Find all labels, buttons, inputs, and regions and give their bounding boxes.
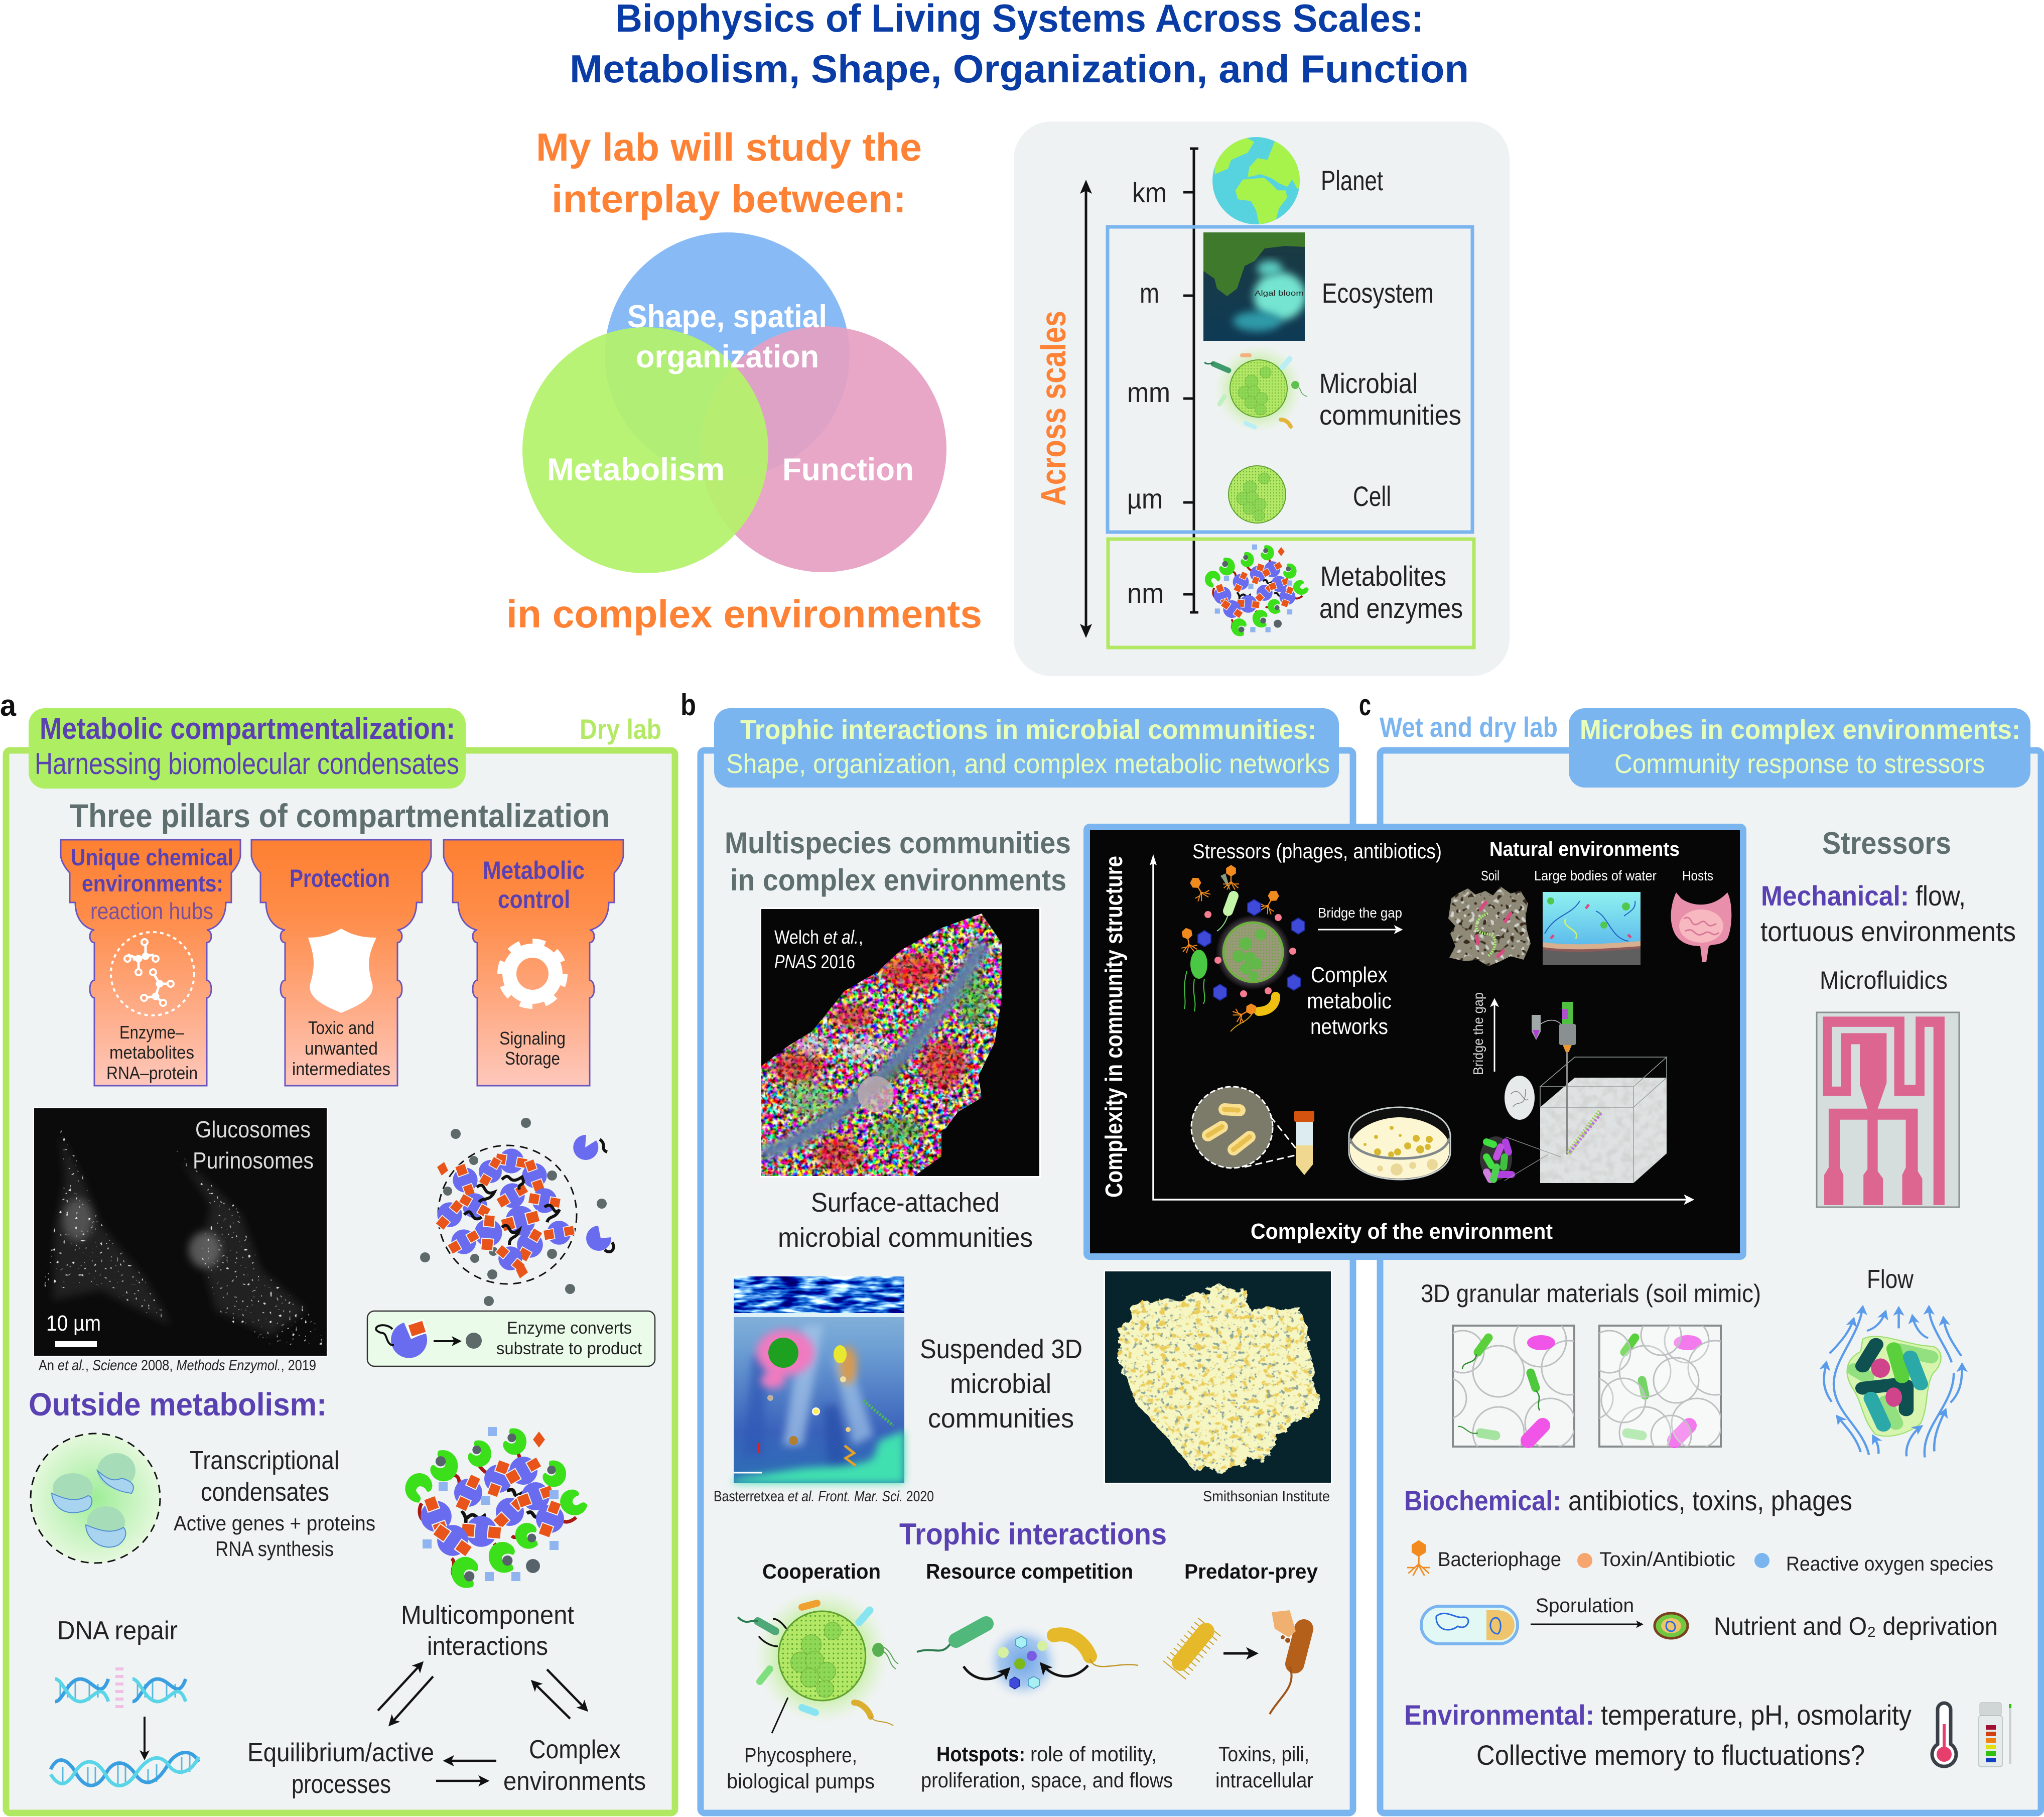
arrow: DNA repair	[144, 1717, 146, 1758]
scale labels: communities	[1319, 399, 1461, 431]
diagram: sporulation: Nutrient and O₂ deprivation	[1714, 1612, 1998, 1640]
legend: biochemical agents: Toxin/Antibiotic	[1599, 1548, 1735, 1571]
heading: trophic interactions: Trophic interactions	[899, 1517, 1167, 1551]
y axis arrowhead	[1150, 854, 1157, 865]
text: environmental stressors	[1404, 1699, 1912, 1771]
scale labels: Cell	[1353, 480, 1391, 512]
subheadings: interaction types: Cooperation	[762, 1560, 881, 1583]
subheadings: interaction types: Resource competition	[926, 1560, 1133, 1583]
double arrow	[1080, 180, 1092, 638]
labels: environments: Hosts	[1682, 868, 1713, 883]
intro heading: My lab will study the	[536, 125, 922, 169]
image: algal bloom: Algal bloom	[1255, 289, 1304, 298]
icon: 3D printed bacteria in gel	[1480, 1002, 1667, 1183]
pillar: metabolic control	[444, 840, 623, 1086]
icon: multicomponent enzyme cluster	[401, 1427, 592, 1590]
pillar: protection: Toxic and	[308, 1017, 374, 1038]
panel: across scales	[1014, 121, 1510, 676]
image: marine snow aggregate	[1104, 1270, 1332, 1484]
cycle: multicomponent interactions	[247, 1601, 646, 1799]
heading: multispecies communities: Multispecies communities	[725, 826, 1071, 860]
panel letter b: b	[680, 688, 696, 722]
header a: Harnessing biomolecular condensates	[35, 747, 459, 781]
text: microfluidics: Microfluidics	[1820, 966, 1948, 994]
pillar: protection	[251, 840, 431, 1086]
pillar: unique chemical environments: Enzyme–	[119, 1022, 184, 1043]
subheadings: interaction types	[762, 1560, 1318, 1583]
icon: shield	[308, 929, 376, 1013]
panel c: microbes in complex environments	[1359, 688, 2041, 1813]
icon: microbial community	[1204, 344, 1307, 433]
text: suspended communities	[920, 1334, 1082, 1434]
heading: outside metabolism: Outside metabolism:	[29, 1386, 327, 1422]
icon: metabolites and enzymes	[1202, 545, 1311, 637]
cycle: multicomponent interactions: Equilibrium/active	[247, 1738, 434, 1767]
cycle: multicomponent interactions: interactions	[427, 1632, 548, 1661]
labels: environments: Large bodies of water	[1534, 868, 1657, 883]
pillar: metabolic control: Metabolic	[483, 856, 585, 884]
icon: test tube culture	[1191, 1087, 1314, 1175]
label: natural environments: Natural environments	[1489, 838, 1680, 860]
captions: image sources: Basterretxea et al. Front. Mar. Sci. 2020	[714, 1488, 934, 1505]
caption: surface-attached: microbial communities	[778, 1223, 1033, 1253]
icon: large bodies of water	[1543, 892, 1641, 965]
text: hotspots	[921, 1742, 1173, 1792]
diagram: granular box 1	[1452, 1325, 1575, 1448]
cycle: multicomponent interactions: processes	[292, 1770, 391, 1799]
scale labels	[1319, 165, 1463, 624]
y axis label: Complexity in community structure	[1101, 856, 1128, 1198]
pillar: protection: intermediates	[292, 1059, 390, 1079]
caption: surface-attached	[778, 1188, 1033, 1253]
header b	[714, 708, 1339, 788]
venn diagram: Function	[782, 452, 914, 487]
label: bridge the gap horizontal: Bridge the gap	[1318, 905, 1402, 921]
heading: three pillars: Three pillars of compartmentalization	[70, 797, 610, 834]
pillar: metabolic control: Storage	[505, 1048, 560, 1069]
pillar: unique chemical environments: environments:	[82, 870, 223, 896]
text: DNA repair: DNA repair	[57, 1616, 178, 1645]
image: surface-attached community: Welch et al.,	[774, 927, 863, 948]
text: cooperation caption: Phycosphere,	[744, 1743, 857, 1767]
label: complex metabolic networks: Complex	[1311, 963, 1388, 987]
panel letter a: a	[0, 689, 17, 722]
text: suspended communities: Suspended 3D	[920, 1334, 1082, 1364]
text: transcriptional condensates: condensates	[201, 1478, 329, 1507]
cycle: multicomponent interactions: Multicomponent	[401, 1601, 575, 1630]
text: transcriptional condensates: RNA synthesis	[215, 1537, 334, 1561]
unit labels	[1127, 177, 1170, 609]
text: environmental stressors: temperature, pH, osmolarity	[1601, 1699, 1912, 1731]
header a: Metabolic compartmentalization:	[40, 712, 455, 745]
heading: stressors: Stressors	[1822, 826, 1951, 861]
scale labels: Microbial	[1319, 367, 1418, 399]
label: complex metabolic networks: metabolic	[1307, 989, 1392, 1013]
text: flow: Flow	[1867, 1265, 1914, 1294]
pillar: unique chemical environments: reaction hubs	[90, 898, 213, 924]
text: hotspots: Hotspots:	[936, 1742, 1025, 1766]
venn diagram: Metabolism	[547, 452, 725, 487]
x axis label: Complexity of the environment	[1251, 1219, 1553, 1244]
legend: biochemical agents: Bacteriophage	[1438, 1548, 1561, 1571]
legend: biochemical agents: Reactive oxygen species	[1786, 1553, 1993, 1575]
image: algal bloom	[1203, 232, 1306, 341]
pillar: protection: Protection	[290, 864, 390, 892]
icon: thermometer	[1932, 1703, 1956, 1766]
title	[570, 0, 1469, 91]
legend: enzyme converts substrate	[367, 1311, 655, 1366]
icon: broken DNA	[55, 1667, 186, 1710]
pillar: unique chemical environments: RNA–protein	[106, 1063, 198, 1083]
venn diagram: organization	[636, 339, 819, 374]
intro heading	[536, 125, 922, 221]
diagram: condensate with enzymes	[420, 1118, 613, 1306]
icon: planet	[1212, 137, 1300, 224]
text: biochemical stressors: Biochemical:	[1404, 1485, 1561, 1516]
legend: enzyme converts substrate: substrate to product	[496, 1339, 642, 1358]
icon: pH vial	[1979, 1703, 2011, 1767]
axes	[1153, 857, 1692, 1200]
subheading: in complex environments: in complex environments	[506, 592, 982, 636]
venn diagram	[522, 232, 946, 573]
scale labels: Ecosystem	[1322, 277, 1434, 309]
icon: cell	[1229, 466, 1286, 523]
text: transcriptional condensates: Active genes + proteins	[174, 1511, 375, 1535]
scale labels: Planet	[1321, 165, 1383, 196]
tag: dry lab: Dry lab	[580, 713, 661, 745]
pillar: unique chemical environments	[61, 840, 240, 1086]
icon: predator-prey	[1174, 1610, 1304, 1714]
venn diagram: Shape, spatial	[627, 299, 827, 334]
image: glucosomes micrograph: Glucosomes	[195, 1116, 311, 1142]
text: biochemical stressors	[1404, 1485, 1852, 1516]
text: hotspots: role of motility,	[1030, 1742, 1157, 1766]
text: predator caption: Toxins, pili,	[1218, 1742, 1309, 1766]
diagram: sporulation: Sporulation	[1536, 1595, 1634, 1617]
size ruler	[1183, 149, 1198, 612]
panel a: metabolic compartmentalization	[0, 689, 675, 1813]
label: complex metabolic networks	[1307, 963, 1392, 1039]
subheadings: interaction types: Predator-prey	[1184, 1560, 1318, 1583]
pillar: unique chemical environments: metabolites	[109, 1042, 194, 1063]
cycle: multicomponent interactions: Complex	[529, 1735, 621, 1764]
captions: image sources: Smithsonian Institute	[1203, 1488, 1330, 1505]
text: suspended communities: communities	[928, 1403, 1074, 1434]
text: granular materials: 3D granular materials (soil mimic)	[1421, 1279, 1761, 1308]
header c: Community response to stressors	[1614, 749, 1985, 779]
community under stress	[1178, 865, 1305, 1031]
labels: environments: Soil	[1481, 868, 1500, 883]
icon: enzyme molecules in dashed circle	[111, 932, 194, 1015]
tag: wet and dry lab: Wet and dry lab	[1380, 711, 1558, 743]
blue scale box	[1108, 227, 1472, 532]
across scales label: Across scales	[1034, 311, 1073, 506]
header b: Shape, organization, and complex metabolic networks	[726, 749, 1330, 779]
label: complex metabolic networks: networks	[1310, 1014, 1388, 1039]
text: cooperation caption	[727, 1743, 875, 1793]
pillar: protection: unwanted	[305, 1038, 378, 1059]
text: transcriptional condensates: Transcriptional	[190, 1446, 339, 1475]
scale labels: and enzymes	[1319, 592, 1463, 624]
label: bridge the gap vertical: Bridge the gap	[1470, 992, 1486, 1075]
label: stressors: Stressors (phages, antibiotics)	[1192, 839, 1442, 863]
diagram: granular box 2	[1598, 1325, 1722, 1448]
heading: multispecies communities: in complex environments	[730, 863, 1066, 897]
image: glucosomes micrograph: Purinosomes	[193, 1147, 314, 1174]
icon: resource competition	[917, 1623, 1138, 1701]
text: mechanical stressors: Mechanical:	[1761, 880, 1909, 912]
heading: multispecies communities	[725, 826, 1071, 897]
unit labels: km	[1132, 177, 1167, 208]
icon: biofilm in flow	[1824, 1307, 1962, 1458]
image: glucosomes micrograph	[33, 1107, 328, 1357]
text: hotspots: proliferation, space, and flows	[921, 1768, 1173, 1792]
unit labels: m	[1140, 277, 1159, 309]
icon: petri dish	[1349, 1107, 1450, 1180]
unit labels: mm	[1127, 376, 1170, 408]
icon: repaired DNA	[51, 1752, 199, 1787]
header b: Trophic interactions in microbial communities:	[740, 715, 1316, 745]
text: environmental stressors: Environmental:	[1404, 1699, 1594, 1731]
caption: micrograph citation: An et al., Science 2008, Methods Enzymol., 2019	[39, 1357, 316, 1374]
text: predator caption	[1215, 1742, 1313, 1792]
text: predator caption: intracellular	[1215, 1768, 1313, 1792]
text: cooperation caption: biological pumps	[727, 1769, 875, 1793]
icon: gear	[501, 943, 564, 1005]
scale labels: Metabolites	[1320, 560, 1446, 592]
icon: transcriptional condensate	[31, 1434, 160, 1563]
text: transcriptional condensates	[174, 1446, 375, 1561]
unit labels: µm	[1127, 483, 1163, 514]
icon: soil	[1448, 886, 1531, 967]
panel letter c: c	[1359, 688, 1371, 722]
labels: environments	[1481, 868, 1713, 883]
pillar: metabolic control: Signaling	[499, 1028, 566, 1049]
caption: surface-attached: Surface-attached	[811, 1188, 1000, 1218]
unit labels: nm	[1127, 577, 1164, 609]
panel b: trophic interactions	[680, 688, 1353, 1813]
title: Metabolism, Shape, Organization, and Function	[570, 47, 1469, 91]
legend: biochemical agents	[1407, 1541, 1993, 1576]
image: glucosomes micrograph: 10 µm	[46, 1311, 101, 1336]
icon: intestine host	[1671, 892, 1731, 962]
green scale box	[1108, 539, 1474, 647]
text: biochemical stressors: antibiotics, toxins, phages	[1568, 1485, 1852, 1516]
header c: Microbes in complex environments:	[1580, 715, 2020, 745]
pillar: unique chemical environments: Unique chemical	[71, 844, 233, 870]
intro heading: interplay between:	[552, 177, 906, 221]
text: environmental stressors: Collective memory to fluctuations?	[1476, 1739, 1865, 1771]
cycle: multicomponent interactions: environments	[503, 1767, 646, 1796]
text: mechanical stressors: flow,	[1916, 880, 1966, 912]
icon: cooperation phycosphere	[738, 1588, 898, 1733]
image: suspended community	[734, 1276, 904, 1483]
panel: complexity landscape	[1087, 827, 1743, 1257]
header c	[1569, 708, 2030, 788]
captions: image sources	[714, 1488, 1330, 1505]
text: mechanical stressors: tortuous environments	[1760, 916, 2016, 947]
legend: enzyme converts substrate: Enzyme converts	[507, 1319, 632, 1338]
diagram: sporulation	[1421, 1595, 1998, 1644]
icon: microfluidic chip	[1817, 1012, 1959, 1207]
image: surface-attached community	[760, 907, 1041, 1178]
text: suspended communities: microbial	[950, 1369, 1051, 1399]
text: mechanical stressors	[1760, 880, 2016, 947]
pillar: metabolic control: control	[498, 885, 570, 914]
image: surface-attached community: PNAS 2016	[774, 952, 855, 973]
header a	[29, 708, 466, 789]
